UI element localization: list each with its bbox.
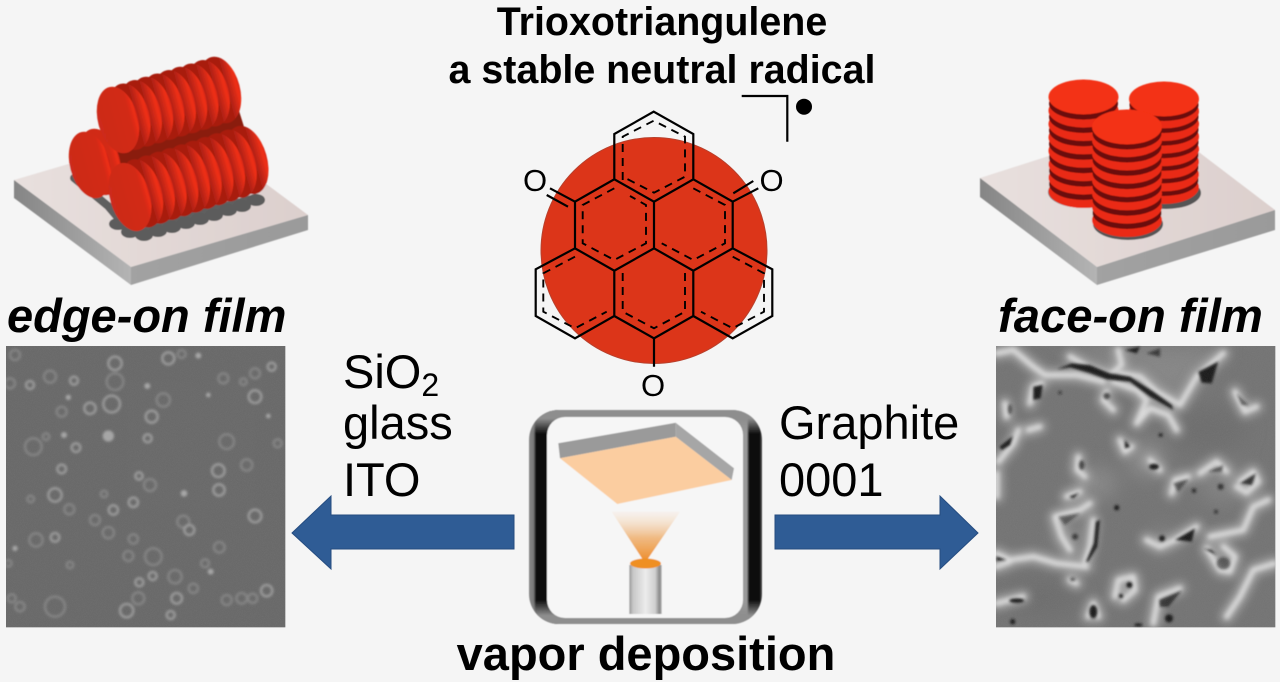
dark cracks and pits bbox=[997, 347, 1256, 627]
substrate labels: SiO2, glass, ITO: glass bbox=[343, 396, 453, 449]
vapor plume bbox=[612, 512, 680, 563]
substrate bbox=[980, 121, 1275, 285]
chamber frame bbox=[529, 410, 762, 624]
molecule: trioxotriangulene on red disc bbox=[523, 112, 784, 403]
heading: edge-on film: edge-on film bbox=[7, 289, 286, 342]
front stack bbox=[1092, 110, 1162, 237]
edge-on film schematic bbox=[14, 52, 308, 285]
substrate bbox=[14, 128, 308, 285]
broad tonal patches bbox=[1068, 346, 1232, 544]
oxygen labels: O bbox=[523, 163, 547, 198]
arrow: left to edge-on film bbox=[292, 496, 514, 569]
top column bbox=[90, 52, 248, 158]
substrate labels: SiO2, glass, ITO: 2 bbox=[421, 367, 439, 403]
SEM image: edge-on film bbox=[5, 346, 285, 627]
substrate labels: SiO2, glass, ITO: SiO bbox=[343, 345, 421, 398]
bright ridges bbox=[996, 350, 1275, 623]
title: Trioxotriangulene bbox=[497, 0, 827, 44]
substrate labels: Graphite 0001: Graphite bbox=[779, 396, 959, 449]
substrate labels: SiO2, glass, ITO: ITO bbox=[343, 453, 420, 506]
substrate holder bbox=[558, 423, 734, 504]
vapor deposition chamber icon bbox=[529, 410, 762, 624]
title bbox=[449, 0, 875, 92]
radical bracket and dot bbox=[742, 96, 812, 142]
front-bottom column bbox=[101, 121, 276, 236]
red disc bbox=[541, 138, 767, 364]
ridge glow bbox=[996, 350, 1275, 623]
stack shadows bbox=[1048, 176, 1201, 240]
face-on film schematic bbox=[980, 80, 1275, 285]
SEM image: face-on film bbox=[996, 346, 1275, 627]
substrate labels: Graphite 0001: 0001 bbox=[779, 453, 884, 506]
disc shadows bbox=[74, 178, 265, 241]
substrate labels: Graphite 0001 bbox=[779, 396, 959, 506]
delocalised dashed rings bbox=[543, 121, 764, 328]
caption: vapor deposition: vapor deposition bbox=[457, 627, 835, 680]
skeleton bonds bbox=[536, 112, 772, 367]
crucible bbox=[629, 558, 662, 614]
rear-left column bbox=[62, 98, 245, 203]
molecule: trioxotriangulene on red disc: O bbox=[759, 163, 784, 198]
arrow: right to face-on film bbox=[775, 496, 978, 569]
back-left stack bbox=[1048, 80, 1118, 208]
heading: face-on film: face-on film bbox=[998, 290, 1263, 343]
molecule: trioxotriangulene on red disc: O bbox=[641, 368, 665, 403]
back-right stack bbox=[1129, 82, 1199, 204]
substrate labels: SiO2, glass, ITO bbox=[343, 345, 453, 506]
title: a stable neutral radical bbox=[449, 48, 875, 92]
